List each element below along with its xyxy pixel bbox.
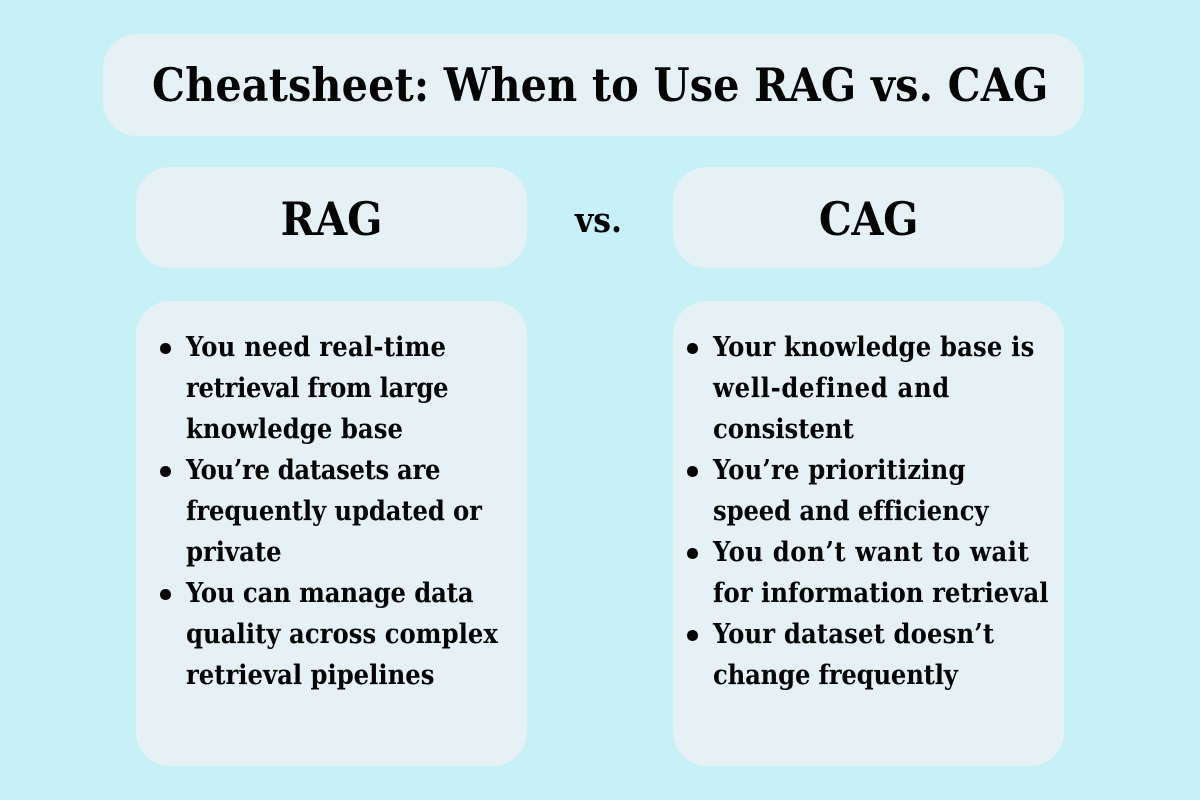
panel: RAG list: retrieval pipelines bbox=[186, 660, 434, 691]
panel: RAG list bbox=[136, 301, 527, 766]
panel: RAG list: quality across complex bbox=[186, 619, 498, 650]
panel: RAG list: knowledge base bbox=[186, 414, 403, 445]
CAG heading: CAG bbox=[819, 192, 918, 246]
vs label: vs. bbox=[575, 200, 622, 241]
panel: CAG list: for information retrieval bbox=[713, 578, 1048, 609]
panel: CAG list: speed and efficiency bbox=[713, 496, 988, 527]
panel: RAG list: You’re datasets are bbox=[186, 455, 440, 486]
title banner bbox=[103, 34, 1084, 136]
RAG heading: RAG bbox=[281, 192, 382, 246]
title: Cheatsheet: When to Use RAG vs. CAG bbox=[152, 58, 1048, 112]
panel: RAG list: You need real-time bbox=[186, 332, 446, 363]
panel: CAG list: change frequently bbox=[713, 660, 958, 691]
panel: RAG list: You can manage data bbox=[186, 578, 473, 609]
panel: CAG list: You don’t want to wait bbox=[713, 537, 1029, 568]
panel: RAG list: retrieval from large bbox=[186, 373, 448, 404]
panel: RAG list: private bbox=[186, 537, 282, 568]
panel: CAG list: Your dataset doesn’t bbox=[713, 619, 994, 650]
panel: CAG list: Your knowledge base is bbox=[713, 332, 1034, 363]
panel: CAG list: You’re prioritizing bbox=[713, 455, 966, 486]
panel: CAG list: consistent bbox=[713, 414, 854, 445]
panel: CAG list bbox=[673, 301, 1064, 766]
RAG heading panel bbox=[136, 167, 527, 268]
CAG heading panel bbox=[673, 167, 1064, 268]
panel: RAG list: frequently updated or bbox=[186, 496, 482, 527]
panel: CAG list: well-defined and bbox=[713, 373, 950, 404]
